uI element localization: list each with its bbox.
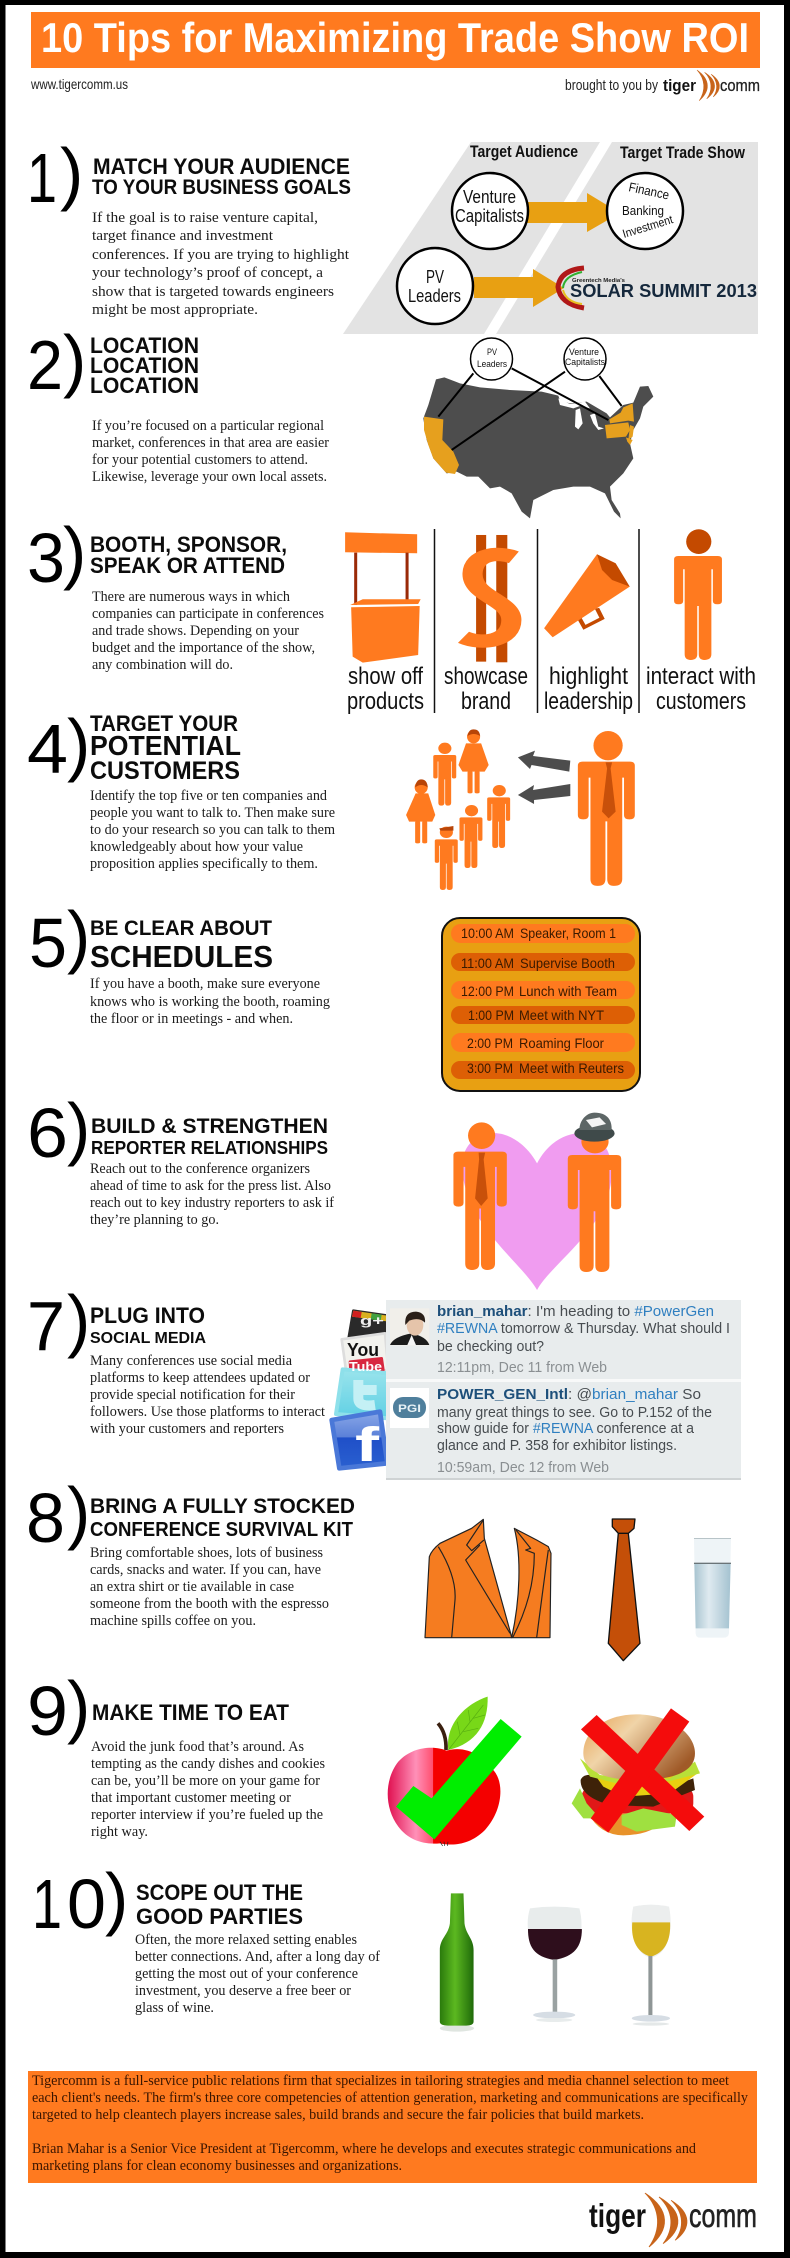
- body 1: conferences. If you are trying to highlight: [92, 247, 350, 263]
- body 8: Bring comfortable shoes, lots of business: [90, 1545, 323, 1561]
- body 9: [91, 1739, 325, 1840]
- number 1: [27, 134, 83, 217]
- body 5: [90, 976, 330, 1027]
- glass of water: [694, 1538, 731, 1638]
- schedule card: 10:00 AM: [461, 925, 514, 941]
- US map with highlighted states: Leaders: [477, 359, 507, 369]
- body 10: glass of wine.: [135, 2000, 214, 2016]
- audience to trade show diagram: Finance: [627, 179, 671, 202]
- small people group: [406, 729, 510, 890]
- heading 8: [90, 1495, 355, 1541]
- number 10: ): [105, 1859, 128, 1937]
- about panel: targeted to help cleantech players increase sales, build brands and secure the fair policies that build markets.: [32, 2107, 644, 2123]
- schedule card: 2:00 PM: [467, 1035, 513, 1051]
- tweet 2: glance and P. 358 for exhibitor listings.: [437, 1437, 677, 1454]
- tip 1: [27, 134, 758, 334]
- arrows: [518, 751, 570, 804]
- US map with highlighted states: [423, 338, 653, 518]
- participation icons: showcase: [444, 663, 528, 690]
- brought to you by tigercomm: brought to you by: [565, 77, 658, 94]
- about panel: Brian Mahar is a Senior Vice President at Tigercomm, where he develops and executes strategic communications and: [32, 2141, 696, 2157]
- heading 8: CONFERENCE SURVIVAL KIT: [90, 1519, 353, 1541]
- number 3: [27, 513, 86, 597]
- solar summit logo: [558, 268, 757, 308]
- audience to trade show diagram: Target Audience: [470, 142, 578, 161]
- body 1: your technology’s proof of concept, a: [92, 265, 323, 281]
- heading 4: TARGET YOUR: [90, 711, 238, 736]
- tweet 1: brian_mahar: I'm heading to #PowerGen: [437, 1303, 714, 1320]
- website url: www.tigercomm.us: [30, 76, 128, 92]
- heading 3: SPEAK OR ATTEND: [90, 553, 285, 578]
- body 8: someone from the booth with the espresso: [90, 1596, 329, 1612]
- icon: megaphone: [544, 554, 630, 637]
- body 8: [90, 1545, 329, 1629]
- number 5: ): [67, 897, 90, 975]
- about panel: [28, 2071, 757, 2183]
- audience to trade show diagram: [343, 142, 758, 334]
- participation icons: products: [347, 688, 424, 715]
- tip 2: [27, 321, 653, 518]
- schedule card: Speaker, Room 1: [520, 925, 616, 941]
- number 7: 7: [27, 1287, 65, 1365]
- body 8: an extra shirt or tie available in case: [90, 1579, 294, 1595]
- body 6: Reach out to the conference organizers: [90, 1161, 310, 1177]
- body 3: [92, 589, 324, 673]
- jacket: [425, 1519, 551, 1638]
- US map with highlighted states: Capitalists: [565, 357, 605, 367]
- brought to you by tigercomm: tiger: [663, 76, 696, 95]
- body 4: to do your research so you can talk to them: [90, 822, 335, 838]
- glass of red wine: [528, 1907, 582, 2022]
- schedule card: 12:00 PM: [461, 983, 514, 999]
- heading 8: BRING A FULLY STOCKED: [90, 1495, 355, 1518]
- body 10: Often, the more relaxed setting enables: [135, 1932, 357, 1948]
- participation icons: leadership: [544, 688, 633, 715]
- body 3: and trade shows. Depending on your: [92, 623, 299, 639]
- participation icons: [345, 529, 756, 715]
- body 2: for your potential customers to attend.: [92, 452, 308, 468]
- participation icons: brand: [461, 688, 511, 715]
- burger with red X: [572, 1708, 704, 1835]
- audience to trade show diagram: Banking: [622, 203, 664, 218]
- glass of champagne: [632, 1905, 671, 2026]
- audience to trade show diagram: Leaders: [408, 286, 461, 306]
- number 10: [32, 1859, 128, 1943]
- tweet 2: POWER_GEN_Intl: @brian_mahar So: [437, 1386, 701, 1403]
- heading 7: SOCIAL MEDIA: [90, 1330, 206, 1347]
- number 2: [27, 321, 86, 404]
- survival kit illustration: [425, 1519, 731, 1661]
- heading 5: SCHEDULES: [90, 939, 273, 974]
- heading 2: LOCATION: [90, 353, 199, 378]
- body 7: [90, 1353, 326, 1437]
- schedule card: 1:00 PM: [468, 1007, 514, 1023]
- tweet 2: many great things to see. Go to P.152 of the: [437, 1404, 712, 1421]
- body 4: knowledgeably about how your value: [90, 839, 303, 855]
- tweet 1: [437, 1303, 730, 1376]
- tweet 2: show guide for #REWNA conference at a: [437, 1420, 695, 1437]
- tweet 2: [437, 1386, 712, 1476]
- heading 2: [90, 333, 199, 398]
- body 9: right way.: [91, 1824, 148, 1840]
- audience to trade show diagram: Investment: [621, 212, 675, 241]
- tweet 1: 12:11pm, Dec 11 from Web: [437, 1359, 607, 1376]
- body 9: can be, you’ll be more on your game for: [91, 1773, 320, 1789]
- body 3: any combination will do.: [92, 657, 233, 673]
- audience to trade show diagram: Capitalists: [455, 206, 524, 226]
- man with hat: [568, 1113, 621, 1272]
- body 2: Likewise, leverage your own local assets.: [92, 469, 327, 485]
- tip 3: [27, 513, 756, 715]
- heading 1: TO YOUR BUSINESS GOALS: [92, 176, 351, 199]
- solar summit logo: Greentech Media's: [572, 278, 625, 284]
- body 1: [92, 210, 350, 318]
- heading 5: BE CLEAR ABOUT: [90, 917, 272, 940]
- heading 7: [90, 1303, 206, 1347]
- schedule card: [442, 918, 640, 1091]
- heart: [462, 1133, 612, 1290]
- body 7: Many conferences use social media: [90, 1353, 292, 1369]
- beer bottle: [440, 1893, 474, 2032]
- apple with check mark: [388, 1697, 522, 1846]
- social media icons: f: [355, 1419, 381, 1472]
- heading 6: [91, 1115, 328, 1158]
- body 9: tempting as the candy dishes and cookies: [91, 1756, 325, 1772]
- heading 10: SCOPE OUT THE: [136, 1880, 303, 1905]
- tip 7: [27, 1281, 741, 1480]
- number 6: ): [67, 1089, 90, 1167]
- target customers illustration: [406, 729, 635, 890]
- heading 5: [90, 917, 273, 974]
- participation icons: interact with: [646, 663, 756, 690]
- number 8: ): [67, 1473, 90, 1551]
- number 9: ): [67, 1667, 90, 1745]
- tip 5: [29, 897, 640, 1091]
- number 4: [27, 705, 90, 788]
- brought to you by tigercomm: [565, 70, 760, 101]
- audience to trade show diagram: Target Trade Show: [620, 143, 746, 162]
- schedule card: 11:00 AM: [461, 955, 514, 971]
- food illustration: [388, 1697, 704, 1846]
- tigercomm footer logo: tiger: [589, 2197, 646, 2234]
- body 4: people you want to talk to. Then make sure: [90, 805, 335, 821]
- number 1: 1: [27, 139, 57, 217]
- number 4: 4: [27, 710, 68, 788]
- tigercomm footer logo: [589, 2193, 757, 2247]
- body 1: target finance and investment: [92, 228, 274, 244]
- body 4: [90, 788, 335, 872]
- body 7: with your customers and reporters: [90, 1421, 284, 1437]
- participation icons: show off: [348, 663, 423, 690]
- number 3: 3: [27, 519, 65, 597]
- heading 4: POTENTIAL: [90, 730, 241, 761]
- number 7: ): [67, 1281, 90, 1359]
- solar summit logo: SOLAR SUMMIT 2013: [570, 281, 757, 301]
- avatar: PGI logo: [390, 1388, 429, 1428]
- body 10: [135, 1932, 380, 2016]
- schedule card: Roaming Floor: [519, 1035, 604, 1051]
- body 6: [90, 1161, 334, 1228]
- body 3: budget and the importance of the show,: [92, 640, 315, 656]
- body 3: There are numerous ways in which: [92, 589, 290, 605]
- tip 6: [27, 1089, 621, 1290]
- body 5: If you have a booth, make sure everyone: [90, 976, 320, 992]
- body 9: reporter interview if you’re fueled up the: [91, 1807, 323, 1823]
- body 10: investment, you deserve a free beer or: [135, 1983, 351, 1999]
- heading 9: MAKE TIME TO EAT: [92, 1700, 290, 1725]
- body 10: better connections. And, after a long day of: [135, 1949, 380, 1965]
- drinks illustration: [440, 1893, 671, 2032]
- brought to you by tigercomm: comm: [720, 76, 760, 95]
- number 7: [27, 1281, 90, 1365]
- schedule card: 3:00 PM: [467, 1060, 513, 1076]
- participation icons: customers: [656, 688, 746, 715]
- about panel: Tigercomm is a full-service public relations firm that specializes in tailoring strategies and media channel selection to meet: [32, 2073, 730, 2089]
- heading 3: BOOTH, SPONSOR,: [90, 532, 287, 557]
- body 10: getting the most out of your conference: [135, 1966, 358, 1982]
- number 10: 1: [32, 1865, 62, 1943]
- number 9: [27, 1667, 90, 1750]
- about panel: marketing plans for clean economy businesses and organizations.: [32, 2158, 402, 2174]
- heading 1: MATCH YOUR AUDIENCE: [93, 154, 350, 179]
- icon: person: [674, 529, 722, 660]
- body 1: If the goal is to raise venture capital,: [92, 210, 318, 226]
- heading 3: [90, 532, 287, 578]
- about panel: each client's needs. The firm's three core competencies of attention generation, marketing and communications are specifically: [32, 2090, 748, 2106]
- body 7: provide special notification for their: [90, 1387, 295, 1403]
- big man with tie: [578, 731, 635, 886]
- number 8: 8: [26, 1479, 65, 1557]
- man with tie: [453, 1122, 507, 1270]
- heading 2: LOCATION: [90, 333, 199, 358]
- body 2: market, conferences in that area are easier: [92, 435, 329, 451]
- number 5: 5: [29, 904, 67, 982]
- number 5: [29, 897, 90, 982]
- body 3: companies can participate in conferences: [92, 606, 324, 622]
- tip 4: [27, 705, 635, 890]
- heading 7: PLUG INTO: [90, 1303, 205, 1328]
- US map with highlighted states: PV: [487, 347, 497, 357]
- body 1: might be most appropriate.: [92, 302, 258, 318]
- schedule card: Meet with Reuters: [519, 1060, 624, 1076]
- heading 10: GOOD PARTIES: [136, 1904, 303, 1929]
- heading 4: CUSTOMERS: [90, 757, 240, 785]
- tweet 2: 10:59am, Dec 12 from Web: [437, 1459, 609, 1476]
- number 4: ): [67, 705, 90, 783]
- heading 6: REPORTER RELATIONSHIPS: [91, 1138, 328, 1158]
- number 6: [27, 1089, 90, 1172]
- social media icons: Tube: [349, 1359, 382, 1374]
- body 4: Identify the top five or ten companies and: [90, 788, 327, 804]
- number 1: ): [60, 134, 83, 212]
- social media icons: [332, 1311, 390, 1472]
- avatar: PGI logo: PGI: [398, 1403, 421, 1415]
- number 9: 9: [27, 1672, 68, 1750]
- body 9: that important customer meeting or: [91, 1790, 291, 1806]
- heading 4: [90, 711, 241, 785]
- body 1: show that is targeted towards engineers: [92, 284, 334, 300]
- body 6: reach out to key industry reporters to ask if: [90, 1195, 334, 1211]
- number 10: 0: [67, 1865, 106, 1943]
- US map with highlighted states: Venture: [569, 347, 599, 357]
- body 5: the floor or in meetings - and when.: [90, 1011, 293, 1027]
- body 9: Avoid the junk food that’s around. As: [91, 1739, 304, 1755]
- twitter panel: [386, 1300, 741, 1480]
- tip 8: [26, 1473, 731, 1661]
- number 6: 6: [27, 1094, 68, 1172]
- schedule card: Supervise Booth: [520, 955, 615, 971]
- social media icons: g+: [360, 1313, 385, 1328]
- body 4: proposition applies specifically to them.: [90, 856, 318, 872]
- tip 9: [27, 1667, 704, 1846]
- body 2: [92, 418, 329, 485]
- tip 10: [32, 1859, 671, 2032]
- body 7: followers. Use those platforms to interact: [90, 1404, 326, 1420]
- heading 2: LOCATION: [90, 373, 199, 398]
- number 2: ): [63, 321, 86, 399]
- heart with two men: [453, 1113, 621, 1290]
- body 7: platforms to keep attendees updated or: [90, 1370, 310, 1386]
- number 3: ): [63, 513, 86, 591]
- heading 10: [136, 1880, 303, 1929]
- tweet 1: be checking out?: [437, 1338, 544, 1355]
- icon: booth: [345, 532, 421, 663]
- heading 1: [92, 154, 351, 199]
- schedule card: Lunch with Team: [519, 983, 617, 999]
- tigercomm footer logo: comm: [689, 2197, 757, 2234]
- number 2: 2: [27, 326, 63, 404]
- participation icons: highlight: [549, 663, 628, 690]
- body 8: machine spills coffee on you.: [90, 1613, 256, 1629]
- icon: dollar sign: [463, 535, 514, 662]
- number 8: [26, 1473, 90, 1557]
- tie: [608, 1519, 640, 1661]
- audience to trade show diagram: PV: [426, 267, 444, 287]
- body 6: ahead of time to ask for the press list. Also: [90, 1178, 331, 1194]
- audience to trade show diagram: Venture: [463, 187, 516, 207]
- avatar: photo: [390, 1308, 429, 1346]
- body 5: knows who is working the booth, roaming: [90, 994, 330, 1010]
- body 2: If you’re focused on a particular regional: [92, 418, 324, 434]
- tweet 1: #REWNA tomorrow & Thursday. What should I: [437, 1320, 730, 1337]
- schedule card: Meet with NYT: [519, 1007, 604, 1023]
- body 6: they’re planning to go.: [90, 1212, 219, 1228]
- heading 6: BUILD & STRENGTHEN: [91, 1115, 328, 1138]
- body 8: cards, snacks and water. If you can, have: [90, 1562, 321, 1578]
- social media icons: You: [347, 1340, 379, 1360]
